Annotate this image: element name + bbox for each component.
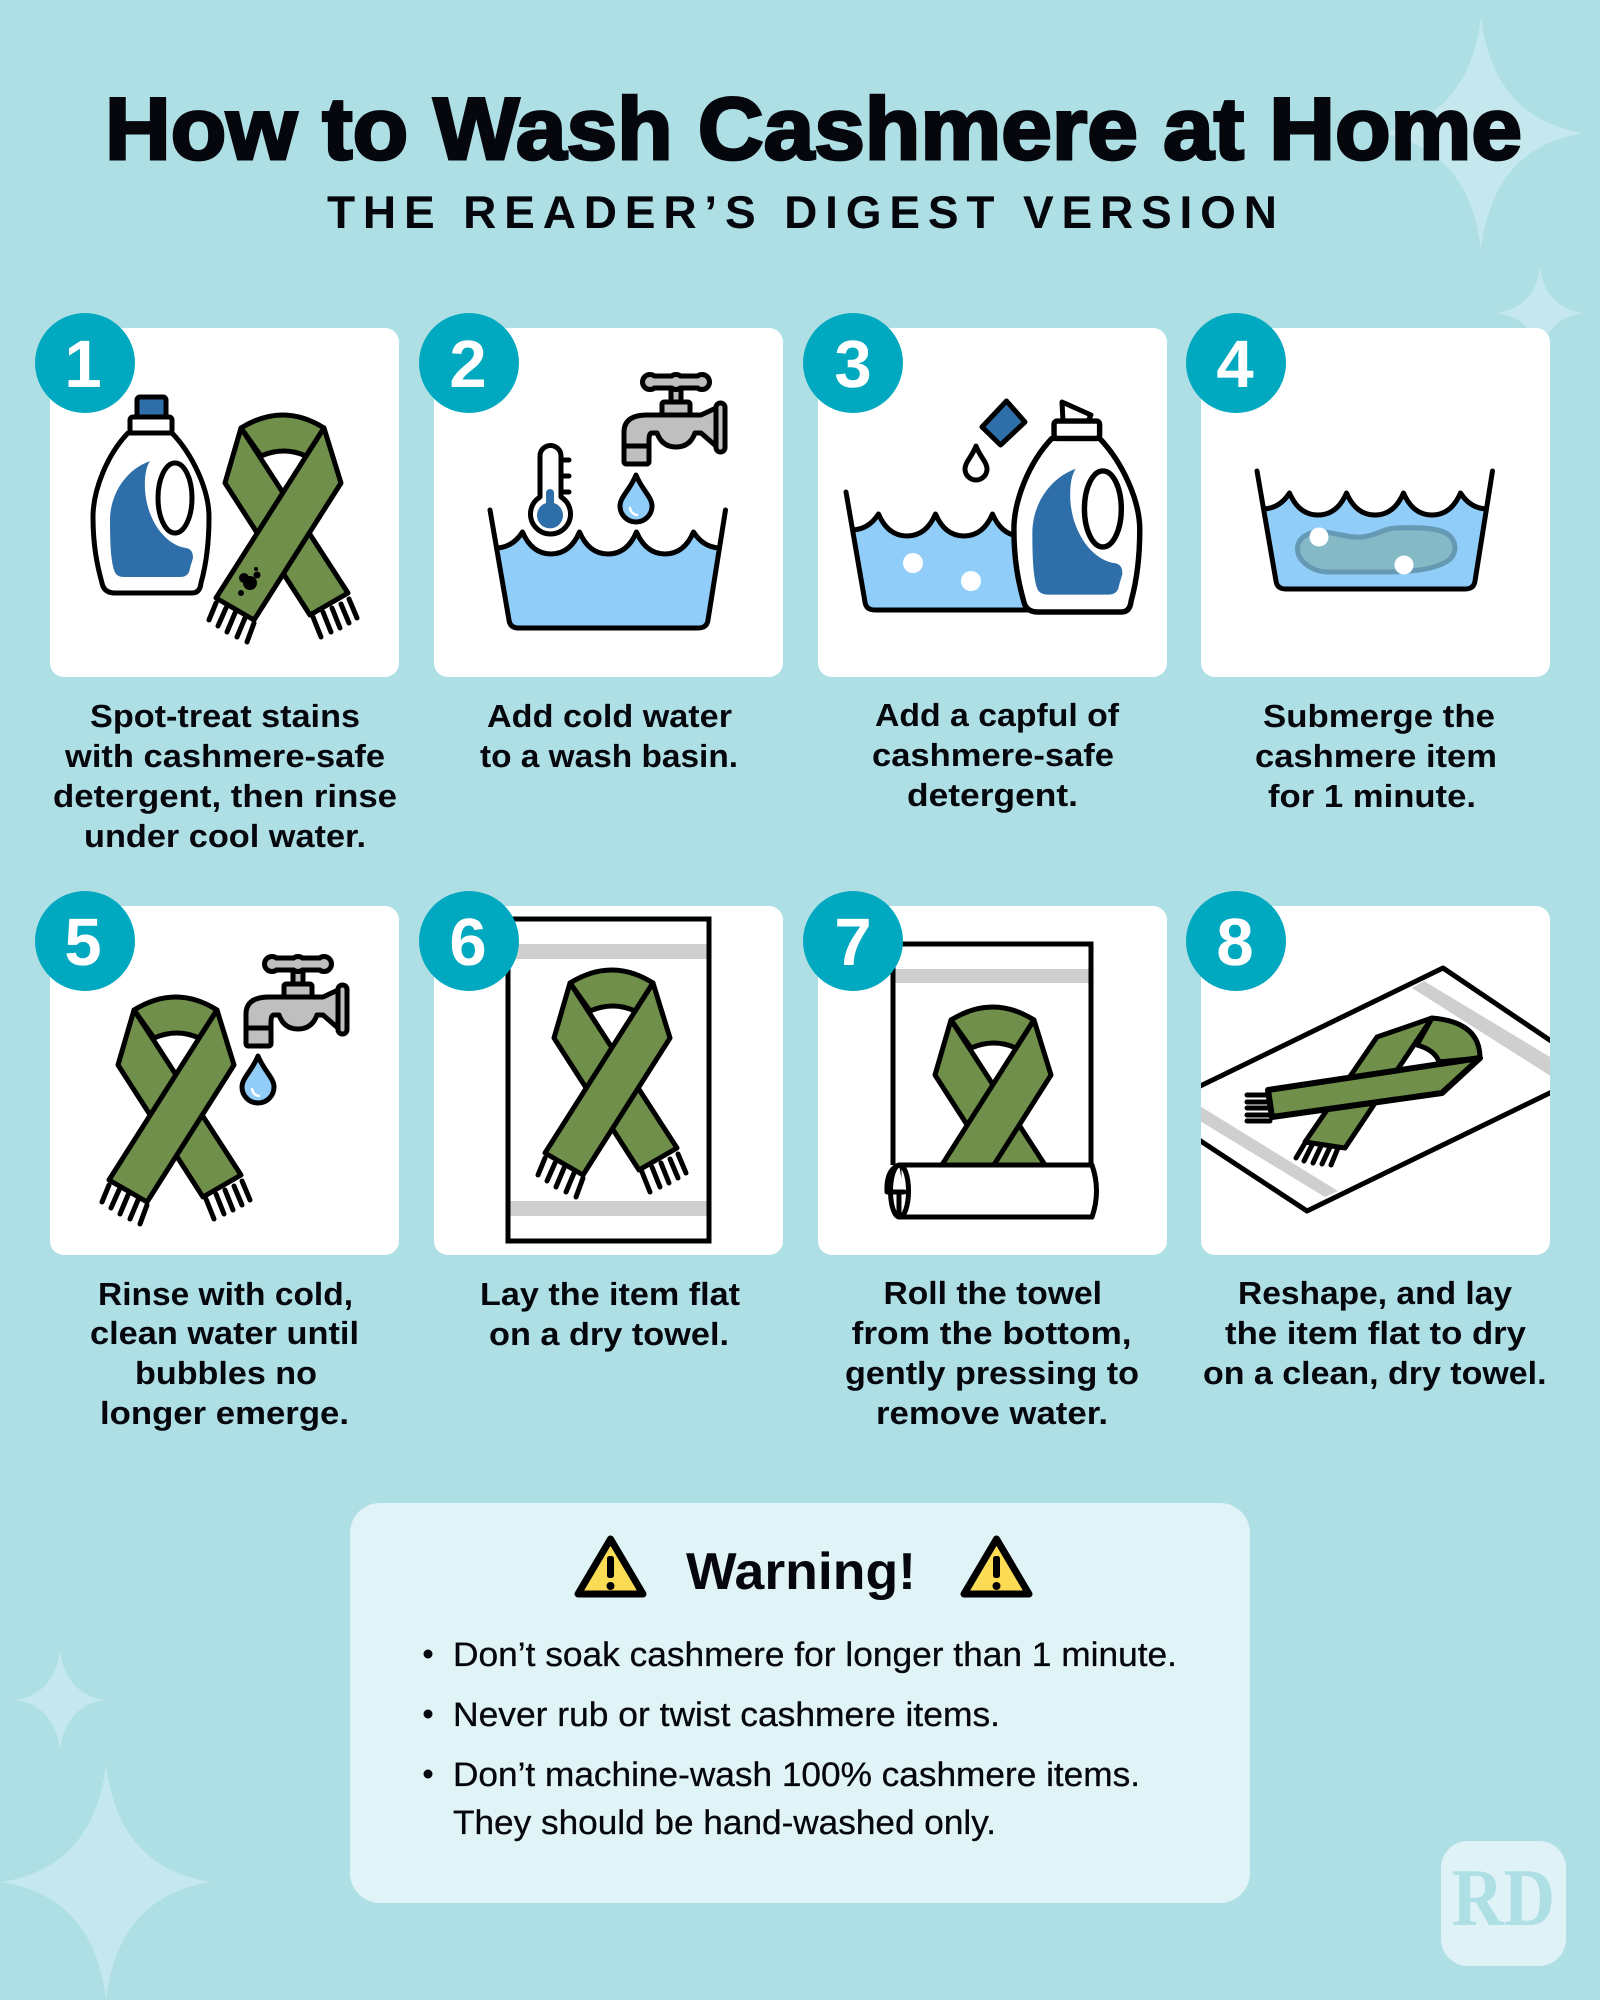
step 8 text: [1203, 1275, 1546, 1391]
panel: step 2: [419, 313, 783, 774]
step number 7: 7: [834, 905, 872, 980]
panel: step 1: [35, 313, 399, 854]
step 1 text: under cool water.: [84, 818, 366, 854]
card: [50, 328, 399, 677]
step 5 text: longer emerge.: [100, 1395, 349, 1431]
panel: warning: [350, 1503, 1250, 1903]
icon: blue detergent cap: [982, 401, 1025, 445]
icon: basin of water with bubbles: [846, 492, 1082, 610]
step number 2: [419, 313, 519, 413]
icon: submerged scarf: [1297, 528, 1455, 572]
logo: RD: [1441, 1841, 1566, 1966]
step number 1: [35, 313, 135, 413]
warning box: [350, 1503, 1250, 1903]
step number 8: 8: [1216, 905, 1254, 980]
card: [1201, 328, 1550, 677]
icon: rolled towel: [887, 1165, 1096, 1217]
step number 8: [1186, 891, 1286, 991]
step number 6: 6: [449, 905, 487, 980]
step 1 text: detergent, then rinse: [53, 778, 397, 814]
step 3 text: Add a capful of: [875, 697, 1119, 733]
card: [818, 906, 1167, 1255]
icon: detergent bottle: [93, 397, 209, 593]
icon: warning triangle right: [964, 1539, 1029, 1594]
step 2 text: Add cold water: [487, 698, 732, 734]
icon: scarf: [932, 1004, 1054, 1162]
card: [818, 328, 1167, 677]
step 7 text: Roll the towel: [884, 1275, 1102, 1311]
bubbles: [1310, 528, 1414, 574]
subtitle: THE READER’S DIGEST VERSION: [327, 186, 1277, 238]
warning bullets: They should be hand-washed only.: [453, 1804, 996, 1842]
step number 7: [803, 891, 903, 991]
step 1 text: with cashmere-safe: [64, 738, 385, 774]
panel: step 8: [1186, 891, 1560, 1391]
warning bullets: Don’t machine-wash 100% cashmere items.: [453, 1756, 1140, 1794]
step 4 text: Submerge the: [1263, 698, 1495, 734]
icon: warning triangle left: [578, 1539, 643, 1594]
icon: scarf on towel: [1247, 1018, 1480, 1165]
step 5 text: [90, 1276, 359, 1431]
icon: towel: [508, 919, 709, 1241]
step number 4: [1186, 313, 1286, 413]
warning heading: Warning!: [686, 1543, 916, 1601]
step 3 text: cashmere-safe: [872, 737, 1114, 773]
step 3 text: [872, 697, 1119, 813]
step 4 text: cashmere item: [1255, 738, 1497, 774]
step 3 text: detergent.: [907, 777, 1078, 813]
icon: scarf: [102, 997, 250, 1224]
step 4 text: [1255, 698, 1497, 814]
icon: faucet: [624, 374, 725, 464]
icon: water drop: [620, 475, 652, 522]
icon: detergent bottle: [1014, 402, 1140, 612]
step 8 text: the item flat to dry: [1225, 1315, 1526, 1351]
card: [434, 906, 783, 1255]
step number 1: 1: [64, 327, 102, 402]
step 5 text: clean water until: [90, 1315, 359, 1351]
icon: stained scarf: [209, 415, 357, 642]
step 6 text: on a dry towel.: [489, 1316, 729, 1352]
step 6 text: [480, 1276, 740, 1352]
step number 3: 3: [834, 327, 872, 402]
icon: basin of water: [1257, 471, 1492, 589]
panel: step 4: [1186, 313, 1550, 814]
step number 4: 4: [1216, 327, 1254, 402]
step 7 text: [845, 1275, 1139, 1431]
warning bullets: Don’t soak cashmere for longer than 1 minute.: [453, 1636, 1177, 1674]
panel: step 3: [803, 313, 1167, 813]
step 7 text: remove water.: [876, 1395, 1108, 1431]
step 5 text: Rinse with cold,: [98, 1276, 353, 1312]
icon: angled towel: [1190, 968, 1560, 1211]
icon: scarf: [538, 970, 686, 1197]
step number 3: [803, 313, 903, 413]
title: How to Wash Cashmere at Home: [105, 79, 1522, 178]
step 2 text: [480, 698, 738, 774]
step 6 text: Lay the item flat: [480, 1276, 740, 1312]
step 1 text: [53, 698, 397, 854]
panel: step 6: [419, 891, 783, 1352]
logo: RD: RD: [1452, 1852, 1555, 1943]
step number 5: 5: [64, 905, 102, 980]
step number 2: 2: [449, 327, 487, 402]
warning bullets: [424, 1636, 1177, 1842]
warning bullets: Never rub or twist cashmere items.: [453, 1696, 1000, 1734]
icon: detergent drop: [965, 446, 987, 480]
step 1 text: Spot-treat stains: [90, 698, 360, 734]
step 8 text: Reshape, and lay: [1238, 1275, 1512, 1311]
step 7 text: from the bottom,: [852, 1315, 1132, 1351]
icon: towel: [893, 944, 1091, 1165]
step number 5: [35, 891, 135, 991]
step number 6: [419, 891, 519, 991]
step 4 text: for 1 minute.: [1268, 778, 1476, 814]
step 8 text: on a clean, dry towel.: [1203, 1355, 1546, 1391]
step 5 text: bubbles no: [135, 1355, 317, 1391]
card: [50, 906, 399, 1255]
step 2 text: to a wash basin.: [480, 738, 738, 774]
icon: faucet: [246, 956, 347, 1046]
panel: step 5: [35, 891, 399, 1431]
panel: step 7: [803, 891, 1167, 1431]
card: [434, 328, 783, 677]
icon: water drop: [242, 1056, 274, 1103]
icon: basin of water: [490, 510, 726, 628]
card: [1201, 906, 1550, 1255]
step 7 text: gently pressing to: [845, 1355, 1139, 1391]
icon: thermometer: [530, 446, 570, 534]
